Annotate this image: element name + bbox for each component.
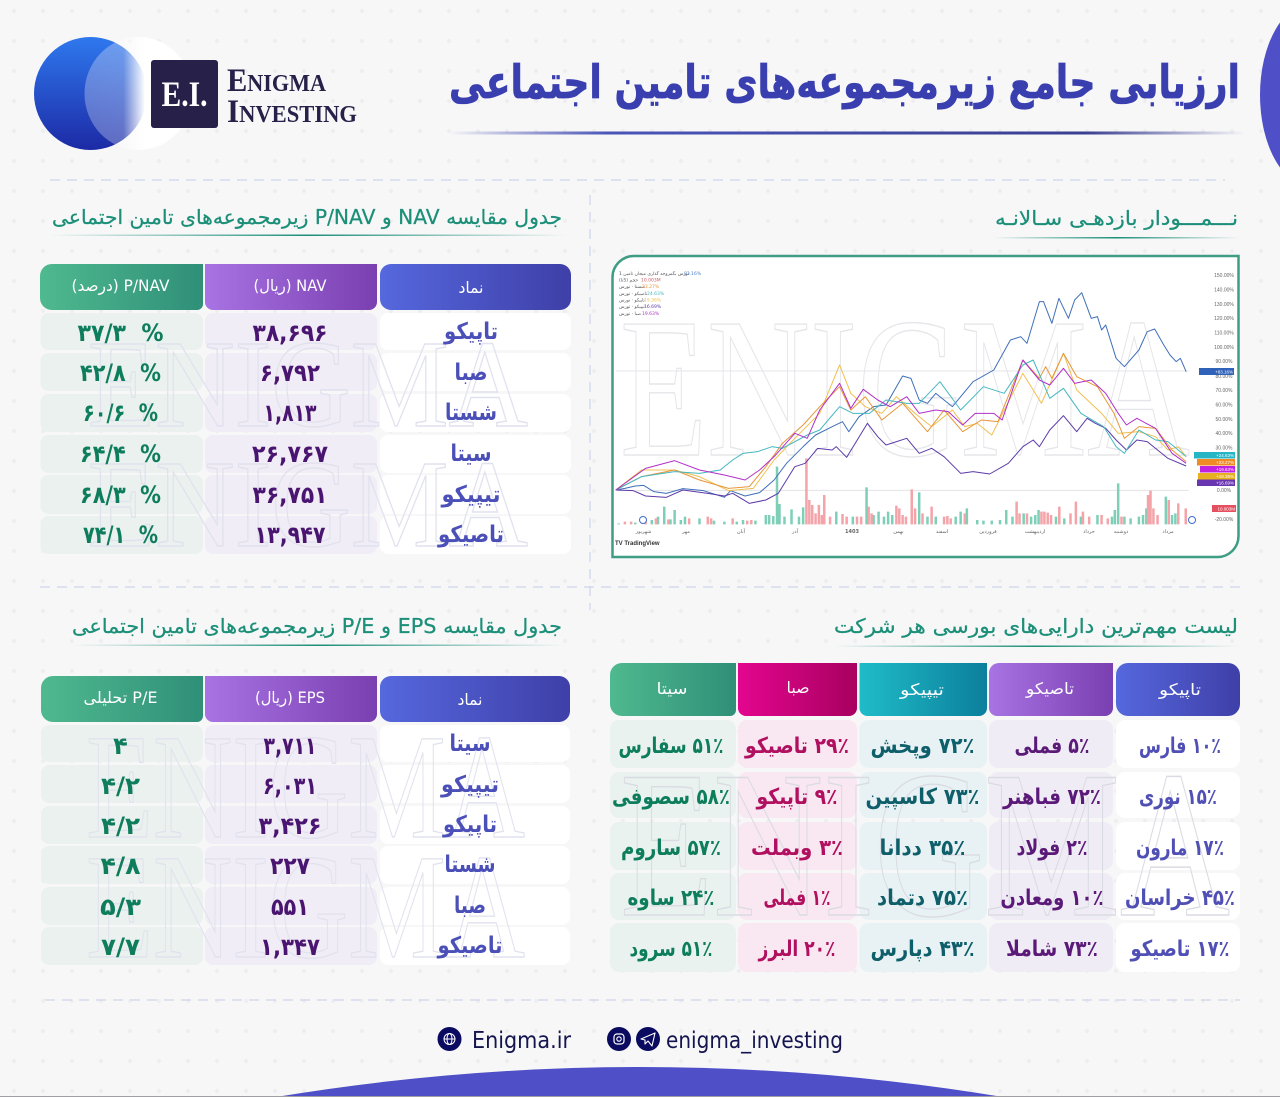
y axis labels: 80.00% xyxy=(1216,374,1233,380)
chart legend: 24.63% xyxy=(647,291,665,297)
column: Sita: ۲۴٪ ساوه xyxy=(628,886,714,911)
panel: holdings list xyxy=(610,614,1240,972)
table header: سیتا xyxy=(656,679,688,698)
column: Saba: ۹٪ تاپیکو xyxy=(756,785,838,810)
column: Saba: ۳٪ وبملت xyxy=(751,836,843,861)
y axis labels: 40.00% xyxy=(1216,431,1233,437)
P/E column: ۴/۲ xyxy=(101,772,140,800)
P/E column xyxy=(100,732,141,961)
column: Saba: ۲۹٪ تاصیکو xyxy=(744,734,849,759)
P/NAV column: ۶۸/۳ % xyxy=(80,481,161,509)
decorative corner: top right xyxy=(1260,3,1280,187)
table rows background xyxy=(40,313,571,554)
table header: EPS (ریال) xyxy=(255,688,325,708)
y axis labels: 100.00% xyxy=(1214,345,1234,351)
column: Tasico: ۷۲٪ فباهنر xyxy=(1002,785,1101,810)
value tags xyxy=(1194,368,1236,512)
column: Tipico: ۷۳٪ کاسپین xyxy=(866,785,980,810)
column: Saba: ۱٪ فملی xyxy=(764,886,830,911)
table header: تاصیکو xyxy=(1025,679,1074,699)
column: Sita: ۵۱٪ سرود xyxy=(630,937,712,962)
y axis labels: 60.00% xyxy=(1216,402,1233,408)
heading: holdings list: لیست مهم‌ترین دارایی‌های بورسی هر شرکت xyxy=(834,614,1238,638)
NAV column: ۱,۸۱۳ xyxy=(264,399,317,427)
column: Tasico: ۲٪ فولاد xyxy=(1016,836,1088,861)
symbol column: صبا xyxy=(454,893,486,919)
icon: globe xyxy=(438,1027,462,1051)
table header: NAV (ریال) xyxy=(254,276,327,296)
heading: EPS table: جدول مقایسه EPS و P/E زیرمجموعه‌های تامین اجتماعی xyxy=(72,614,562,638)
y axis labels: 50.00% xyxy=(1216,417,1233,423)
column: Sita: ۵۸٪ سصوفی xyxy=(612,785,730,810)
x axis months: اسفند xyxy=(936,529,948,535)
column: Tipico: ۷۲٪ وپخش xyxy=(870,734,974,759)
chart legend: تاصیکو · تورس xyxy=(619,291,648,297)
heading underline xyxy=(72,644,565,646)
symbol column xyxy=(437,319,504,548)
symbol column xyxy=(437,731,502,959)
P/NAV column: ۶۰/۶ % xyxy=(83,399,158,427)
column: Tapico: ۱۷٪ مارون xyxy=(1136,836,1224,861)
y axis labels: 130.00% xyxy=(1214,302,1234,308)
symbol column: سیتا xyxy=(450,441,492,467)
panel: EPS and P/E table xyxy=(41,614,570,990)
x axis months: مرداد xyxy=(1162,529,1174,535)
table header xyxy=(610,663,1240,716)
heading underline xyxy=(834,646,1240,647)
table watermark: ENIGMA xyxy=(86,704,525,870)
y axis labels: 30.00% xyxy=(1216,446,1233,452)
chart legend: 1 تورس بگمروجه گذاری میجان تامین xyxy=(619,270,690,277)
P/NAV column xyxy=(78,319,164,549)
P/NAV column: ۷۴/۱ % xyxy=(83,521,158,549)
y axis labels: 90.00% xyxy=(1216,359,1233,365)
logo badge E.I. xyxy=(151,60,218,128)
x axis months: شهریور xyxy=(635,529,651,535)
P/NAV column: ۴۲/۸ % xyxy=(80,359,161,387)
chart lines and volume bars xyxy=(616,292,1188,524)
y axis labels: 150.00% xyxy=(1214,273,1234,279)
column: Tapico: ۱۷٪ تاصیکو xyxy=(1130,937,1230,962)
P/E column: ۵/۳ xyxy=(100,893,141,921)
table cells background xyxy=(610,720,1240,972)
symbol column: شستا xyxy=(444,852,496,878)
NAV column: ۲۶,۷۶۷ xyxy=(252,440,328,468)
symbol column: تیپیکو xyxy=(440,772,499,798)
column: Sita: ۵۱٪ سفارس xyxy=(618,734,724,759)
table header: نماد xyxy=(458,278,484,297)
column: Tasico: ۷۳٪ شاملا xyxy=(1006,937,1098,962)
chart legend xyxy=(619,270,702,317)
symbol column: تیپیکو xyxy=(441,482,500,508)
P/E column: ۴ xyxy=(113,732,128,760)
heading underline xyxy=(48,234,568,236)
heading underline xyxy=(993,237,1240,238)
chart legend: 19.36% xyxy=(644,298,662,304)
column: Tipico: ۳۵٪ ددانا xyxy=(880,836,966,861)
chart legend: تاپیکو · تورس xyxy=(619,298,645,304)
chart legend: 10.003M xyxy=(641,278,661,284)
table header: نماد xyxy=(458,690,482,709)
table watermark xyxy=(88,316,528,574)
y axis labels: 110.00% xyxy=(1214,330,1234,336)
social handle: enigma_investing xyxy=(666,1028,843,1054)
value tags: +19.63% xyxy=(1216,467,1234,472)
value tags: +23.27% xyxy=(1216,460,1234,465)
symbol column: تاپیکو xyxy=(443,319,498,345)
chart legend: صبا · تورس xyxy=(619,312,641,317)
column: Sita xyxy=(612,734,730,962)
NAV column xyxy=(252,319,328,549)
NAV column: ۳۶,۷۵۱ xyxy=(252,481,328,509)
table header xyxy=(41,676,570,722)
y axis labels: 120.00% xyxy=(1214,316,1234,322)
EPS column: ۳,۷۱۱ xyxy=(264,732,316,760)
column: Tapico: ۱۰٪ فارس xyxy=(1139,734,1221,759)
column: Tipico xyxy=(866,734,980,962)
x axis months: بهمن xyxy=(893,529,904,535)
symbol column: تاپیکو xyxy=(442,812,497,838)
value tags: +19.36% xyxy=(1216,474,1234,479)
P/NAV column: ۳۷/۳ % xyxy=(78,319,164,347)
table header: P/NAV (درصد) xyxy=(72,276,170,296)
x axis months: اردیبهشت xyxy=(1025,529,1045,535)
EPS column: ۱,۳۴۷ xyxy=(260,933,320,961)
table rows background xyxy=(41,725,570,965)
decorative bottom arc xyxy=(276,1067,1003,1097)
P/E column: ۴/۲ xyxy=(101,812,140,840)
chart legend: 23.27% xyxy=(642,284,660,290)
P/E column: ۷/۷ xyxy=(101,933,140,961)
table header: تاپیکو xyxy=(1158,680,1201,700)
logo wordmark xyxy=(227,63,357,130)
x axis months: دوشنبه xyxy=(1114,529,1128,535)
chart legend: 16.69% xyxy=(644,304,662,310)
column: Tapico xyxy=(1125,734,1235,962)
TradingView mark: TV TradingView xyxy=(615,541,660,547)
table header: P/E تحلیلی xyxy=(84,688,158,707)
table watermark xyxy=(86,704,525,990)
logo wordmark: INVESTING xyxy=(227,94,357,130)
symbol column: تاصیکو xyxy=(437,933,502,959)
event markers xyxy=(640,516,1196,524)
table header: تیپیکو xyxy=(899,680,944,700)
title underline xyxy=(449,132,1245,134)
icon: telegram xyxy=(636,1027,660,1051)
heading: NAV table: جدول مقایسه NAV و P/NAV زیرمجموعه‌های تامین اجتماعی xyxy=(52,205,562,229)
column: Tasico: ۵٪ فملی xyxy=(1015,734,1090,759)
P/E column: ۴/۸ xyxy=(100,852,141,880)
x axis months: آبان xyxy=(737,528,746,535)
x axis months: مهر xyxy=(681,529,690,535)
column: Tipico: ۷۵٪ دتماد xyxy=(877,886,968,911)
x axis months: خرداد xyxy=(1083,529,1095,535)
y axis labels xyxy=(1214,273,1234,523)
value tags: +83.16% xyxy=(1215,370,1233,374)
EPS column: ۵۵۱ xyxy=(271,893,309,921)
y axis labels: -20.00% xyxy=(1215,517,1234,523)
chart legend: 19.63% xyxy=(642,311,660,317)
value tags: 10.003M xyxy=(1217,506,1235,512)
footer contacts xyxy=(438,1027,843,1054)
column: Tipico: ۴۳٪ دپارس xyxy=(870,937,974,962)
icon: instagram xyxy=(607,1027,631,1051)
value tags: +24.63% xyxy=(1216,453,1234,458)
symbol column: تاصیکو xyxy=(437,522,504,548)
y axis labels: 70.00% xyxy=(1216,388,1233,394)
NAV column: ۶,۷۹۲ xyxy=(260,359,320,387)
EPS column: ۳,۴۲۶ xyxy=(258,812,322,840)
x axis months: آذر xyxy=(791,528,799,535)
column: Sita: ۵۷٪ ساروم xyxy=(621,836,721,861)
table watermark: ENIGMA xyxy=(88,316,528,454)
EPS column: ۲۲۷ xyxy=(270,852,310,880)
logo wordmark: ENIGMA xyxy=(227,63,327,99)
NAV column: ۱۳,۹۴۷ xyxy=(254,521,326,549)
P/NAV column: ۶۴/۴ % xyxy=(80,440,161,468)
value tags: +16.69% xyxy=(1216,480,1234,486)
EPS column: ۶,۰۳۱ xyxy=(263,772,317,800)
x axis months: 1403 xyxy=(845,529,859,535)
symbol column: صبا xyxy=(454,360,488,386)
table watermark: ENIGMA xyxy=(86,824,525,990)
heading: annual return chart: نـــمـــودار بازدهـی سـالانـه xyxy=(995,206,1238,230)
website: Enigma.ir xyxy=(472,1028,571,1054)
column: Tapico: ۴۵٪ خراسان xyxy=(1125,886,1235,911)
y axis labels: 0.00% xyxy=(1217,488,1232,494)
panel: annual return chart xyxy=(612,206,1240,557)
table header xyxy=(40,264,571,310)
chart legend: شستا · تورس xyxy=(619,285,645,290)
table header: صبا xyxy=(786,678,810,697)
logo badge E.I.: E.I. xyxy=(162,74,208,114)
column: Tapico: ۱۵٪ نوری xyxy=(1139,785,1217,810)
y axis labels: 140.00% xyxy=(1214,288,1234,294)
chart frame xyxy=(612,256,1238,557)
column: Tasico xyxy=(1001,734,1104,962)
NAV column: ۳۸,۶۹۶ xyxy=(252,319,328,347)
chart legend: حجم (5تا) xyxy=(619,278,638,284)
logo circles xyxy=(34,37,192,150)
symbol column: شستا xyxy=(445,400,497,426)
column: Saba: ۲۰٪ البرز xyxy=(758,937,836,962)
logo xyxy=(34,37,357,150)
symbol column: سیتا xyxy=(450,731,490,757)
chart legend: 83.16% xyxy=(684,271,702,277)
x axis months xyxy=(635,528,1174,535)
panel: NAV and P/NAV table xyxy=(40,205,571,574)
EPS column xyxy=(258,732,322,961)
column: Tasico: ۱۰٪ ومعادن xyxy=(1001,886,1104,911)
x axis months: فروردین xyxy=(979,529,997,535)
table watermark: ENIGMA xyxy=(88,436,528,574)
chart legend: تیپیکو · تورس xyxy=(619,304,645,310)
column: Saba xyxy=(744,734,849,962)
